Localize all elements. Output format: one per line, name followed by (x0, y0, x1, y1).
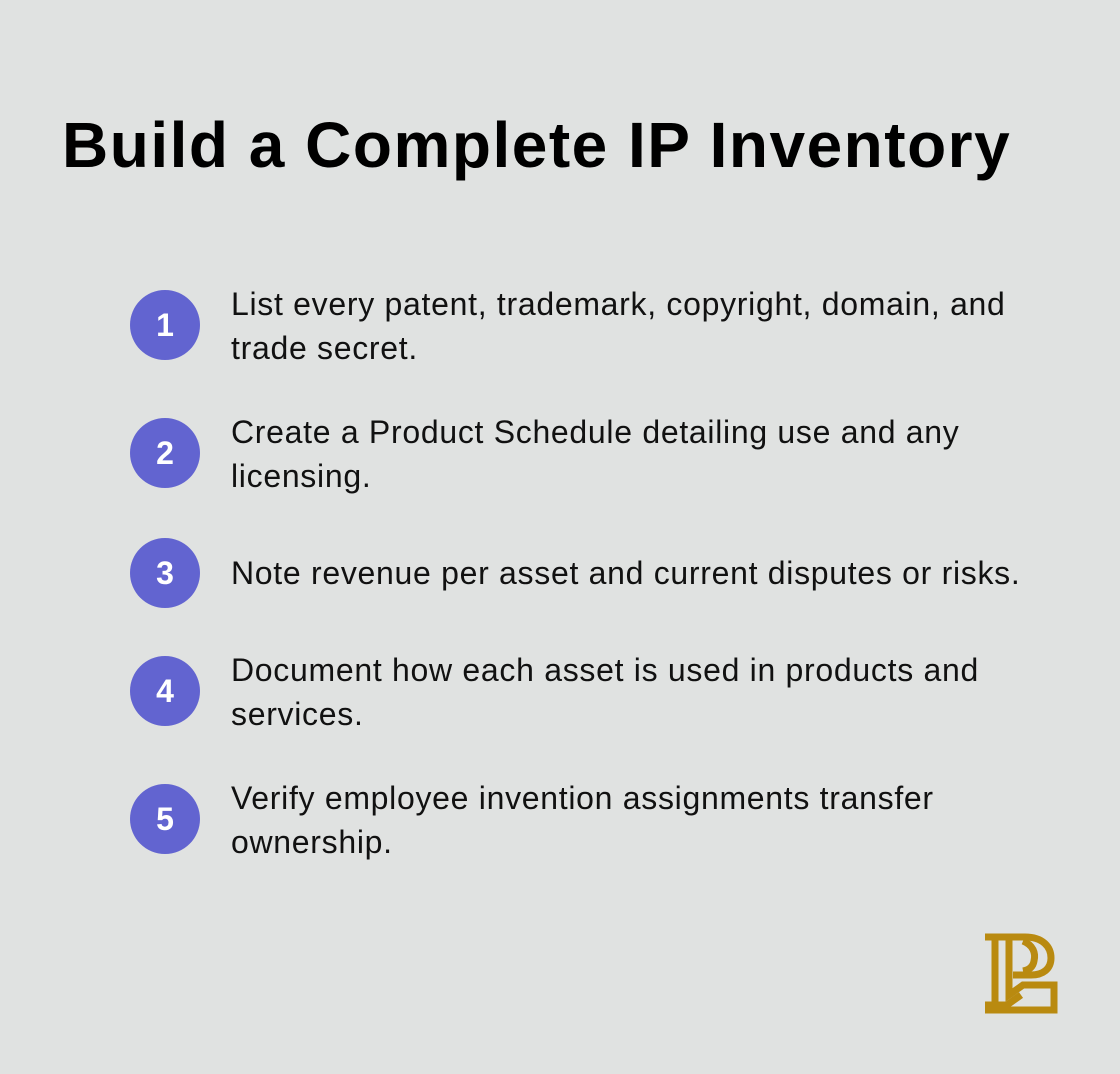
text 4 (231, 652, 979, 732)
text 1 (231, 286, 1006, 366)
text 2 (231, 414, 959, 494)
text 2: licensing. (231, 458, 371, 494)
badge 1 (130, 290, 200, 360)
text 5: Verify employee invention assignments transfer (231, 780, 934, 816)
text 4: services. (231, 696, 364, 732)
text 2: Create a Product Schedule detailing use and any (231, 414, 959, 450)
item 3 (130, 538, 1020, 608)
title: Build a Complete IP Inventory (62, 109, 1011, 181)
item 5 (130, 780, 934, 860)
badge 1: 1 (156, 307, 174, 343)
badge 2 (130, 418, 200, 488)
text 3: Note revenue per asset and current disputes or risks. (231, 555, 1020, 591)
badge 5 (130, 784, 200, 854)
item 1 (130, 286, 1006, 366)
badge 3 (130, 538, 200, 608)
item 2 (130, 414, 959, 494)
badge 5: 5 (156, 801, 174, 837)
text 1: List every patent, trademark, copyright, domain, and (231, 286, 1006, 322)
badge 3: 3 (156, 555, 174, 591)
text 5 (231, 780, 934, 860)
logo (985, 934, 1058, 1014)
text 4: Document how each asset is used in products and (231, 652, 979, 688)
text 1: trade secret. (231, 330, 418, 366)
item 4 (130, 652, 979, 732)
text 5: ownership. (231, 824, 393, 860)
badge 4 (130, 656, 200, 726)
badge 2: 2 (156, 435, 174, 471)
badge 4: 4 (156, 673, 174, 709)
